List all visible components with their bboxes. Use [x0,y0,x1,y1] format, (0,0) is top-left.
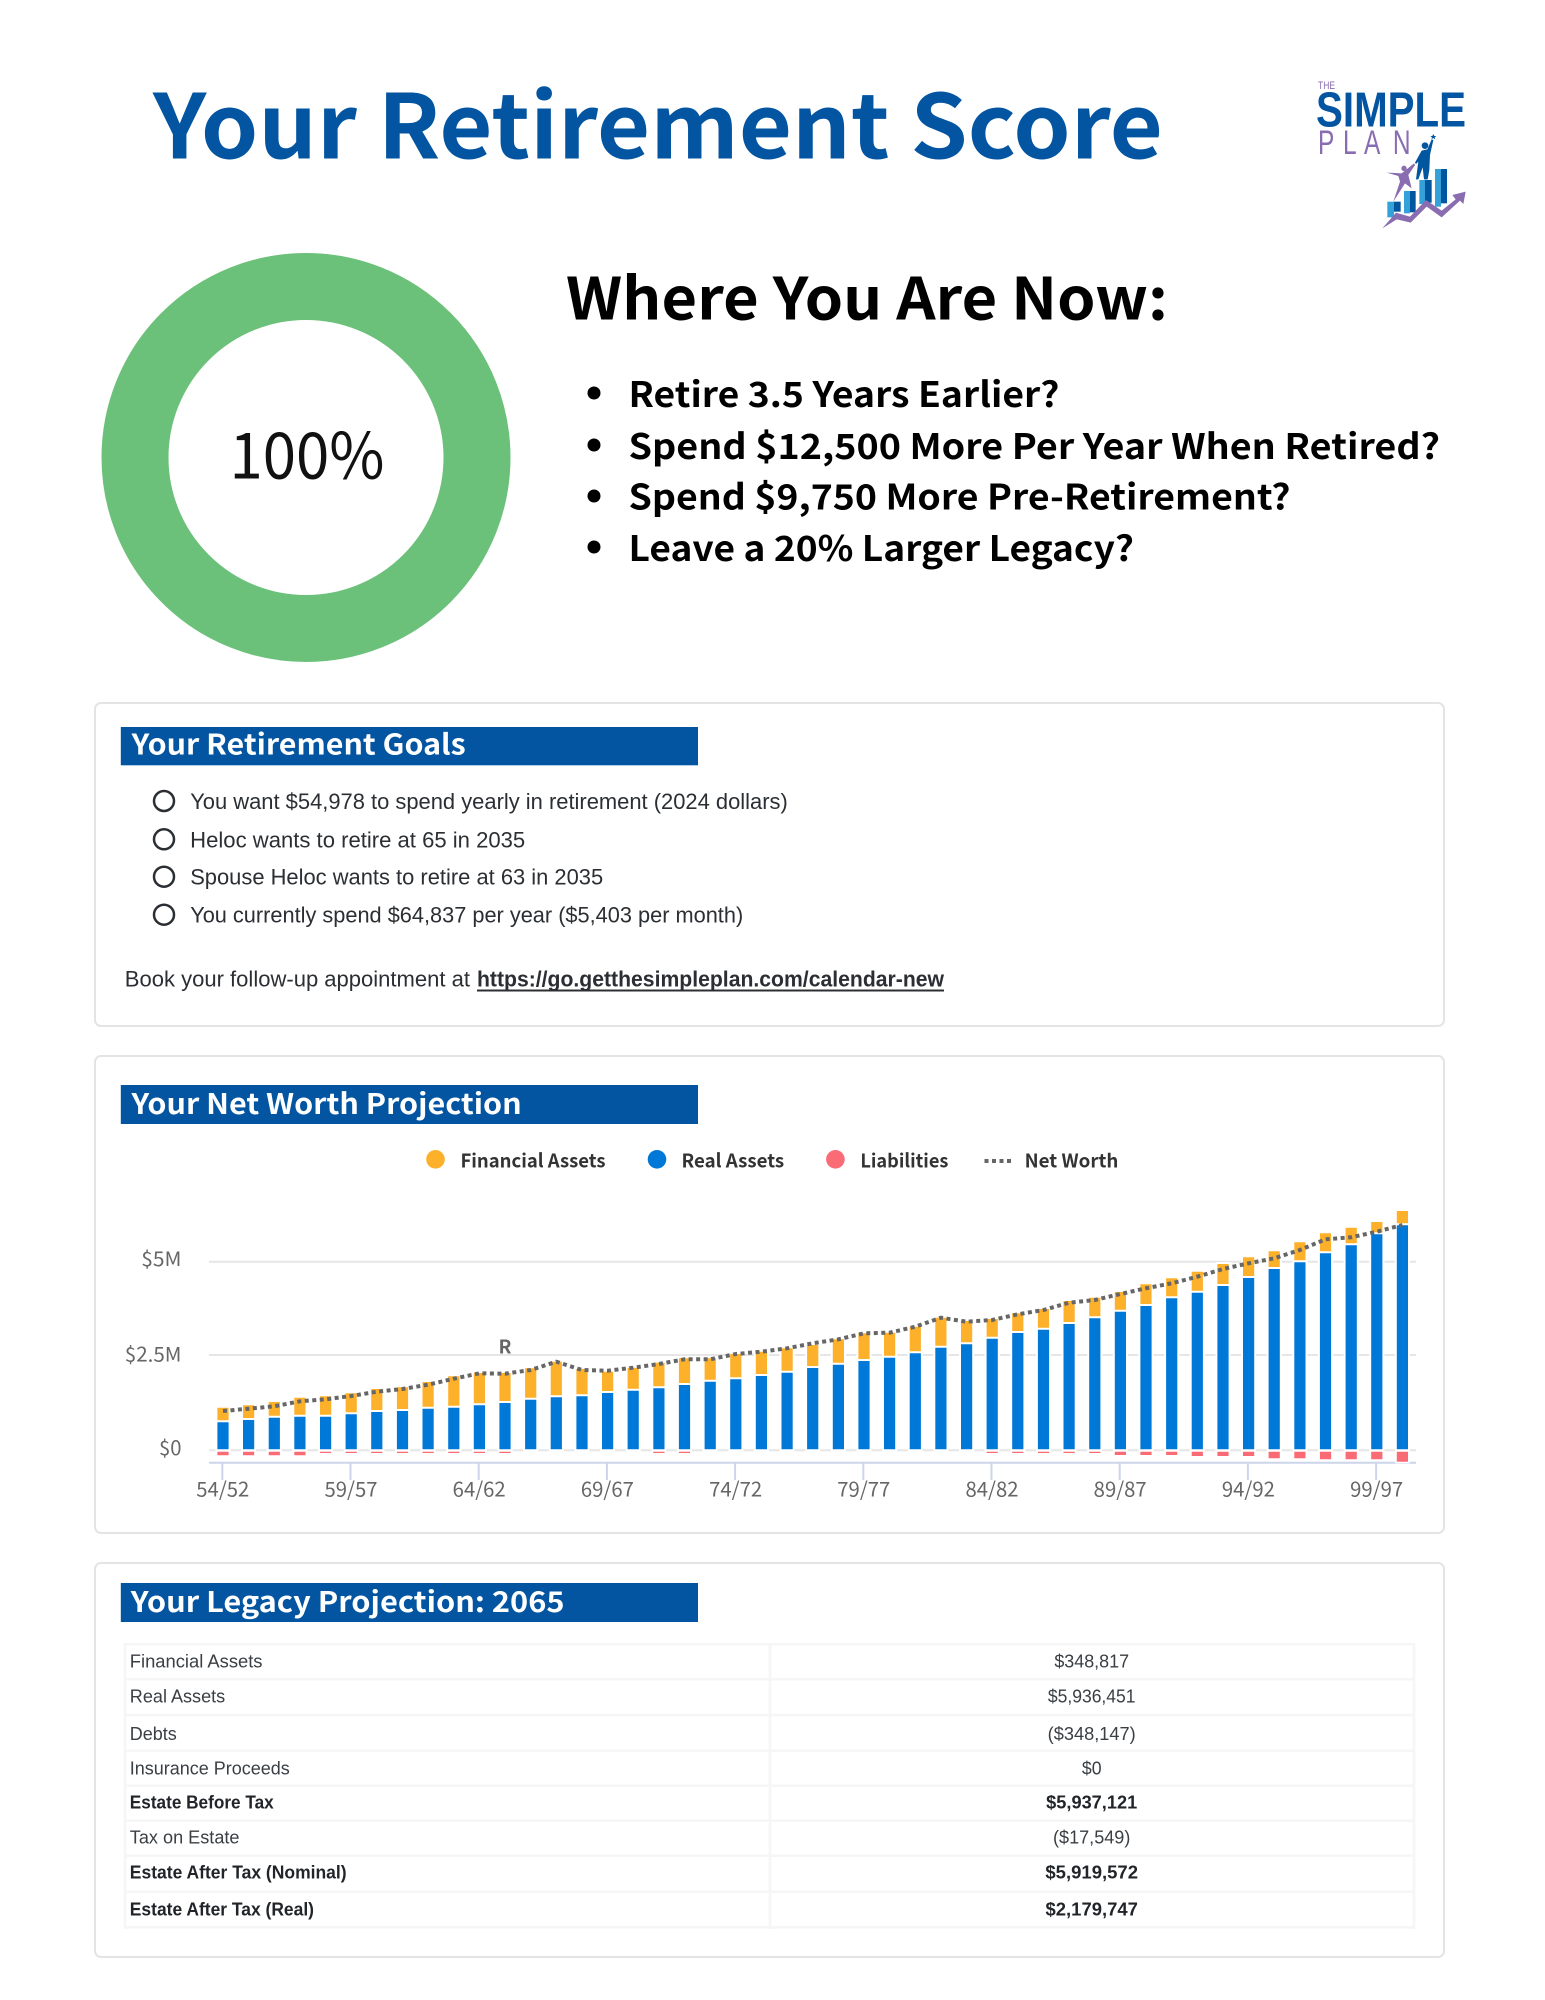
logo: The Simple Plan: SIMPLE [1316,84,1466,138]
y axis labels: $2.5M [125,1339,182,1368]
table row labels: Debts [130,1724,177,1744]
table row labels: Financial Assets [130,1652,262,1672]
table row labels: Real Assets [130,1686,225,1706]
heading: net worth projection: Your Net Worth Projection [130,1082,522,1123]
x axis labels: 94/92 [1222,1474,1275,1503]
goals list: You currently spend $64,837 per year ($5,403 per month) [190,903,743,928]
chart legend: Real Assets [682,1146,784,1173]
retirement marker: R [499,1332,512,1359]
bullet list: what-if questions: Spend $9,750 More Pre-Retirement? [628,470,1290,521]
stacked bar chart [125,1211,1416,1503]
x axis labels: 59/57 [324,1474,378,1503]
table values [1045,1652,1138,1920]
goals list: Spouse Heloc wants to retire at 63 in 2035 [190,864,603,889]
bullet list: what-if questions: Leave a 20% Larger Legacy? [628,521,1134,572]
series: financial assets bars [217,1211,1408,1422]
bullet list: what-if questions: Retire 3.5 Years Earlier? [628,367,1060,418]
table row labels: Tax on Estate [130,1827,240,1847]
x axis labels: 89/87 [1094,1474,1147,1503]
follow-up appointment link [125,967,945,992]
logo: The Simple Plan [1316,80,1466,228]
chart legend: Net Worth [1025,1146,1118,1173]
legacy table [124,1643,1415,1929]
x axis labels: 69/67 [581,1474,634,1503]
bullet list: what-if questions [588,367,1440,572]
bullet list: what-if questions: Spend $12,500 More Per Year When Retired? [628,419,1440,470]
table row labels [130,1652,347,1920]
heading: retirement goals [121,722,698,765]
heading: legacy projection: Your Legacy Projection: 2065 [130,1580,564,1621]
table values: $2,179,747 [1046,1900,1138,1920]
x axis labels: 74/72 [709,1474,762,1503]
x axis labels: 84/82 [966,1474,1018,1503]
heading: legacy projection [121,1580,698,1622]
table values: ($348,147) [1048,1724,1136,1744]
table values: $5,919,572 [1045,1862,1138,1882]
goals list: You want $54,978 to spend yearly in retirement (2024 dollars) [190,789,788,814]
score donut: 100% [230,406,384,498]
follow-up appointment link: https://go.getthesimpleplan.com/calendar-new [477,967,945,992]
goals list [154,789,788,928]
table row labels: Estate After Tax (Real) [130,1900,314,1920]
series: net worth dotted line [223,1225,1402,1411]
table values: $0 [1082,1759,1102,1779]
x axis labels: 99/97 [1350,1474,1403,1503]
chart legend: Liabilities [860,1146,948,1173]
y axis labels: $0 [159,1432,182,1461]
table row labels: Estate After Tax (Nominal) [130,1862,347,1882]
series: real assets bars [217,1225,1408,1449]
x axis labels: 79/77 [837,1474,890,1503]
panel: net worth projection [95,1056,1444,1533]
table values: $348,817 [1054,1652,1129,1672]
y axis labels: $5M [141,1243,182,1272]
follow-up appointment link: Book your follow-up appointment at [125,967,470,992]
series: liabilities bars [217,1452,1408,1462]
goals list: Heloc wants to retire at 65 in 2035 [190,827,525,852]
heading: where you are now: Where You Are Now: [566,252,1168,336]
chart legend: Financial Assets [460,1146,606,1173]
heading: retirement goals: Your Retirement Goals [131,722,466,764]
table values: $5,937,121 [1046,1792,1137,1812]
y axis labels [125,1243,182,1461]
table values: ($17,549) [1053,1827,1130,1847]
panel: legacy projection [95,1563,1444,1957]
table row labels: Estate Before Tax [130,1792,274,1812]
panel: retirement goals [95,703,1444,1026]
score donut [135,286,477,628]
x axis labels: 54/52 [196,1474,249,1503]
x axis labels [196,1474,1403,1503]
logo: The Simple Plan: PLAN [1318,124,1411,162]
heading: net worth projection [121,1082,698,1124]
logo: The Simple Plan: THE [1318,80,1335,92]
table row labels: Insurance Proceeds [130,1759,290,1779]
table values: $5,936,451 [1048,1686,1136,1706]
title: Your Retirement Score [152,56,1163,184]
chart legend [426,1146,1118,1173]
x axis labels: 64/62 [453,1474,506,1503]
